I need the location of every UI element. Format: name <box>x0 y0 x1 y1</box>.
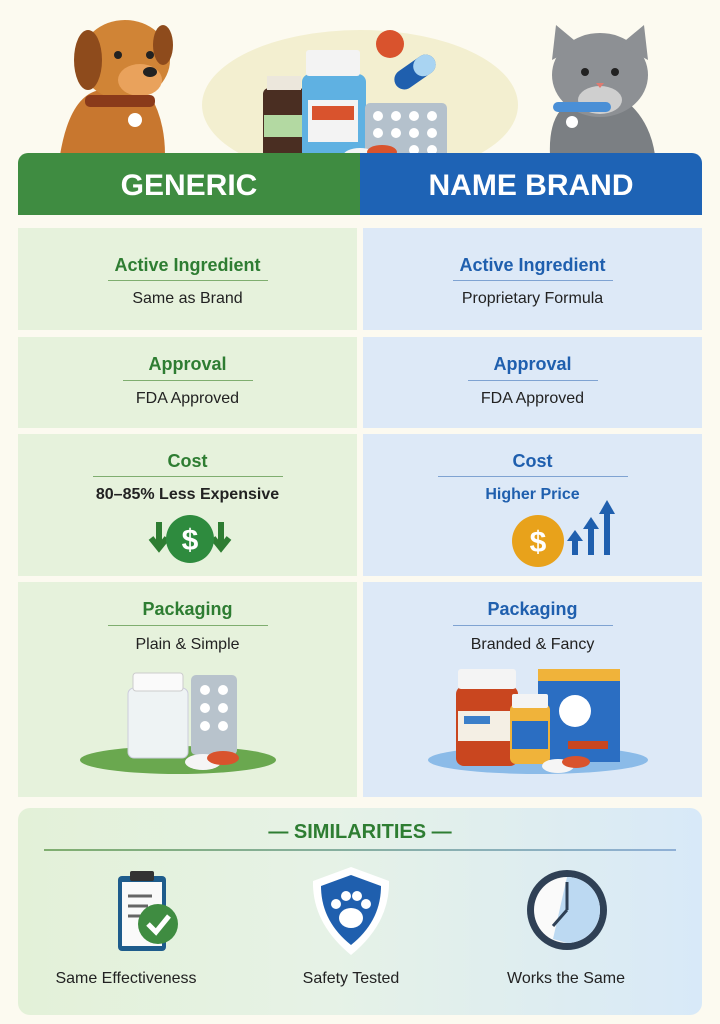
text: works the same: Works the Same <box>507 970 625 987</box>
panel: generic packaging <box>18 582 357 797</box>
icon: coin with up arrows <box>512 500 615 567</box>
heading: name brand: NAME BRAND <box>428 169 634 202</box>
panel: brand cost: Cost <box>512 451 552 471</box>
heading: generic <box>18 153 360 215</box>
panel: generic approval: FDA Approved <box>136 390 239 407</box>
panel: generic packaging: Packaging <box>142 599 233 619</box>
panel: generic cost <box>18 434 357 576</box>
icon: clock <box>527 870 607 950</box>
panel: brand cost <box>363 434 702 576</box>
icon: coin with down arrows <box>148 515 232 563</box>
panel: brand packaging <box>363 582 702 797</box>
panel: generic packaging: Plain & Simple <box>135 636 240 653</box>
bottles <box>263 88 305 160</box>
panel: brand approval: FDA Approved <box>481 390 584 407</box>
dog <box>60 20 173 155</box>
panel: brand active ingredient: Active Ingredient <box>459 255 606 275</box>
panel: generic cost: 80–85% Less Expensive <box>96 486 279 503</box>
panel: generic active ingredient: Active Ingredient <box>114 255 261 275</box>
icon: coin with up arrows: $ <box>530 526 547 559</box>
illustration: plain packaging <box>80 672 276 774</box>
panel: generic approval: Approval <box>148 354 226 374</box>
icon: coin with down arrows: $ <box>182 524 199 557</box>
panel: generic active ingredient: Same as Brand <box>132 290 243 307</box>
panel: brand active ingredient <box>363 228 702 330</box>
illustration: header pets and medicine <box>60 20 655 153</box>
illustration: branded packaging <box>428 669 648 774</box>
icon: clipboard check <box>118 871 178 951</box>
panel: generic approval <box>18 337 357 428</box>
heading: name brand <box>360 153 702 215</box>
panel: generic active ingredient <box>18 228 357 330</box>
panel: brand packaging: Packaging <box>487 599 578 619</box>
heading: similarities: — SIMILARITIES — <box>268 821 452 843</box>
panel: generic cost: Cost <box>168 451 208 471</box>
panel: brand cost: Higher Price <box>485 486 580 503</box>
panel: brand active ingredient: Proprietary Formula <box>462 290 603 307</box>
panel: brand approval: Approval <box>493 354 572 374</box>
icon: shield paw <box>313 867 389 955</box>
heading: generic: GENERIC <box>121 169 257 202</box>
panel: brand packaging: Branded & Fancy <box>471 636 594 653</box>
panel: similarities <box>18 808 702 1015</box>
text: same effectiveness: Same Effectiveness <box>55 970 197 987</box>
cat <box>550 25 655 155</box>
text: safety tested: Safety Tested <box>303 970 399 987</box>
header bar <box>18 153 702 215</box>
panel: brand approval <box>363 337 702 428</box>
